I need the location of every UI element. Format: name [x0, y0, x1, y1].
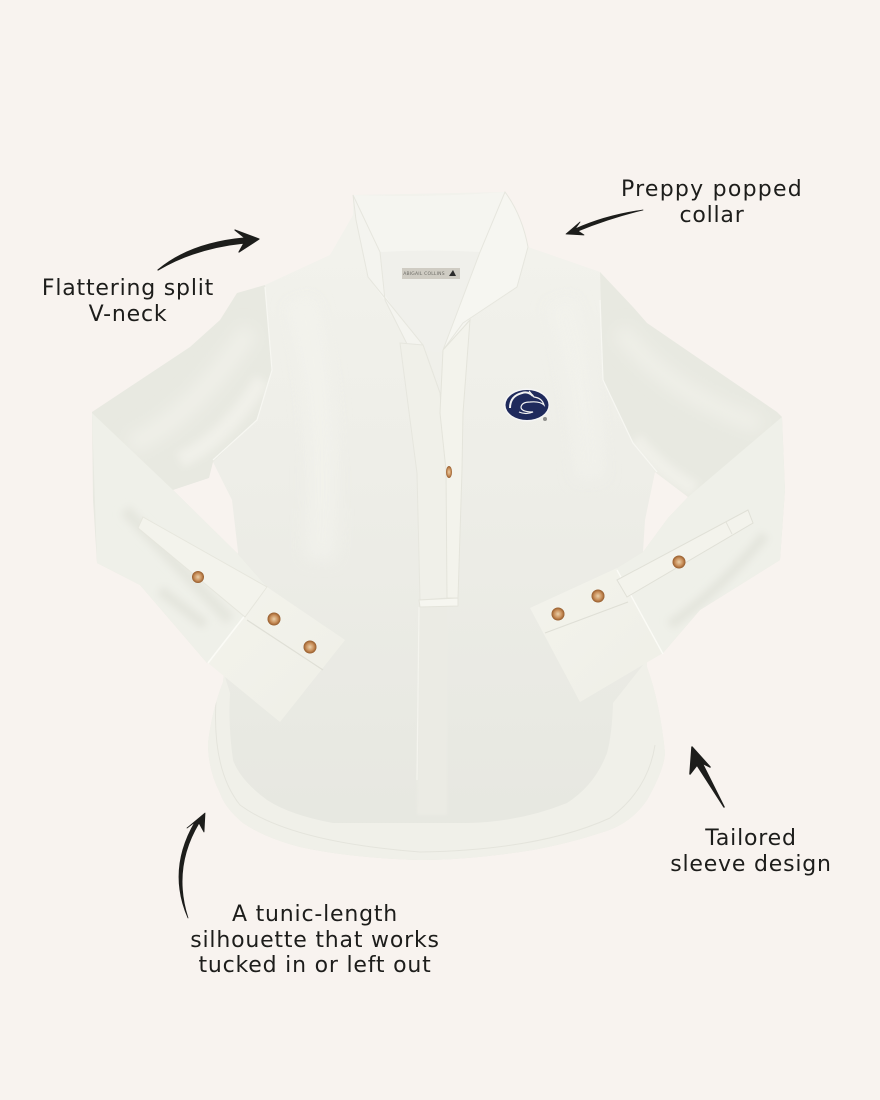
arrow: to sleeve — [690, 747, 724, 807]
text: split V-neck: Flattering split — [42, 276, 214, 301]
pleat strip — [417, 607, 447, 815]
text: tunic length: A tunic-length — [232, 902, 398, 927]
left sleeve placket — [138, 517, 267, 617]
right cuff buttons — [552, 556, 686, 620]
right cuff — [530, 510, 753, 702]
arrow: to hem — [179, 813, 205, 918]
placket — [400, 320, 470, 607]
placket button — [446, 466, 452, 478]
text: split V-neck: V-neck — [89, 302, 167, 327]
shirt tail hem band — [211, 761, 664, 860]
logo — [504, 388, 550, 422]
arrow: to V-neck — [158, 230, 259, 270]
callout: popped collar — [566, 177, 803, 235]
shirt body — [208, 294, 665, 860]
collar inner back — [353, 192, 515, 352]
text: tunic length: tucked in or left out — [198, 953, 432, 978]
neck label — [402, 268, 460, 279]
neck label: ABIGAIL COLLINS — [403, 271, 445, 277]
left cuff buttons — [192, 571, 316, 654]
left cuff — [138, 517, 345, 722]
collar left flap — [353, 195, 447, 470]
text: popped collar: collar — [679, 203, 745, 228]
callout: tunic length — [179, 813, 440, 978]
left sleeve — [92, 285, 272, 663]
callout: split V-neck — [42, 230, 259, 327]
arrow: to collar — [566, 210, 643, 235]
shirt illustration — [92, 192, 785, 870]
text: popped collar: Preppy popped — [621, 177, 803, 202]
right sleeve placket — [617, 510, 753, 597]
text: sleeve design: Tailored — [704, 826, 797, 851]
right sleeve — [600, 272, 785, 653]
callout: sleeve design — [670, 747, 832, 877]
text: tunic length: silhouette that works — [190, 928, 440, 953]
collar right flap — [443, 192, 528, 350]
collar — [353, 192, 528, 470]
text: sleeve design: sleeve design — [670, 852, 832, 877]
